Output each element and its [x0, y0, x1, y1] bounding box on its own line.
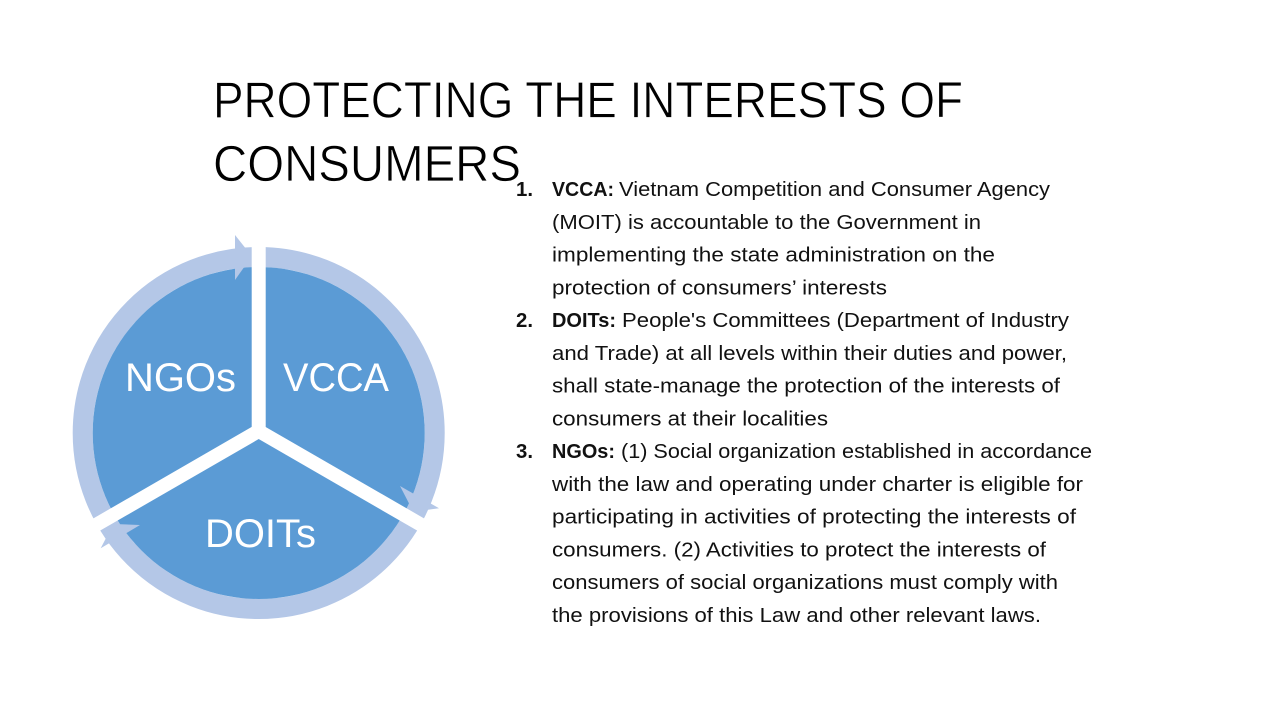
item 3: NGOs — [516, 440, 1092, 627]
arrowhead: NGOs to VCCA — [235, 235, 251, 280]
title: PROTECTING THE INTERESTS OF — [213, 72, 963, 128]
item 1: VCCA — [516, 178, 1051, 299]
item 1: VCCA: implementing the state administration on the — [552, 244, 995, 266]
item 3: NGOs: consumers of social organizations must comply with — [552, 571, 1058, 594]
label: DOITs: DOITs — [205, 512, 316, 556]
arrowhead: VCCA to DOITs — [400, 486, 439, 512]
item 1: VCCA: VCCA: — [552, 178, 614, 201]
item 3: NGOs: with the law and operating under charter is eligible for — [551, 473, 1083, 496]
arrowhead: DOITs to NGOs — [101, 524, 140, 548]
item 3: NGOs: participating in activities of protecting the interests of — [552, 506, 1076, 528]
item 3: NGOs: NGOs: — [552, 440, 615, 463]
item 3: NGOs: (1) Social organization established in accordance — [621, 440, 1092, 463]
central disc — [93, 267, 425, 599]
title — [213, 72, 963, 192]
item 2: DOITs: consumers at their localities — [552, 407, 828, 430]
item 2: DOITs: People's Committees (Department of Industry — [622, 309, 1070, 332]
item 2: DOITs: 2. — [516, 309, 533, 332]
white separators — [78, 236, 440, 540]
item 2: DOITs — [516, 309, 1070, 430]
item 1: VCCA: protection of consumers’ interests — [552, 276, 887, 299]
item 3: NGOs: the provisions of this Law and other relevant laws. — [552, 604, 1041, 627]
item 1: VCCA: (MOIT) is accountable to the Government in — [552, 211, 981, 234]
item 3: NGOs: consumers. (2) Activities to protect the interests of — [552, 538, 1046, 561]
outer ring — [83, 257, 435, 609]
item 2: DOITs: shall state-manage the protection of the interests of — [552, 374, 1060, 398]
item 3: NGOs: 3. — [516, 440, 533, 463]
title: CONSUMERS — [213, 135, 521, 192]
item 2: DOITs: and Trade) at all levels within their duties and power, — [552, 342, 1067, 365]
numbered list — [516, 178, 1092, 627]
item 1: VCCA: 1. — [516, 178, 533, 201]
label: VCCA: VCCA — [283, 356, 389, 400]
item 1: VCCA: Vietnam Competition and Consumer Agency — [619, 178, 1051, 201]
cycle diagram — [78, 235, 440, 609]
item 2: DOITs: DOITs: — [552, 309, 616, 332]
label: NGOs: NGOs — [125, 356, 236, 400]
